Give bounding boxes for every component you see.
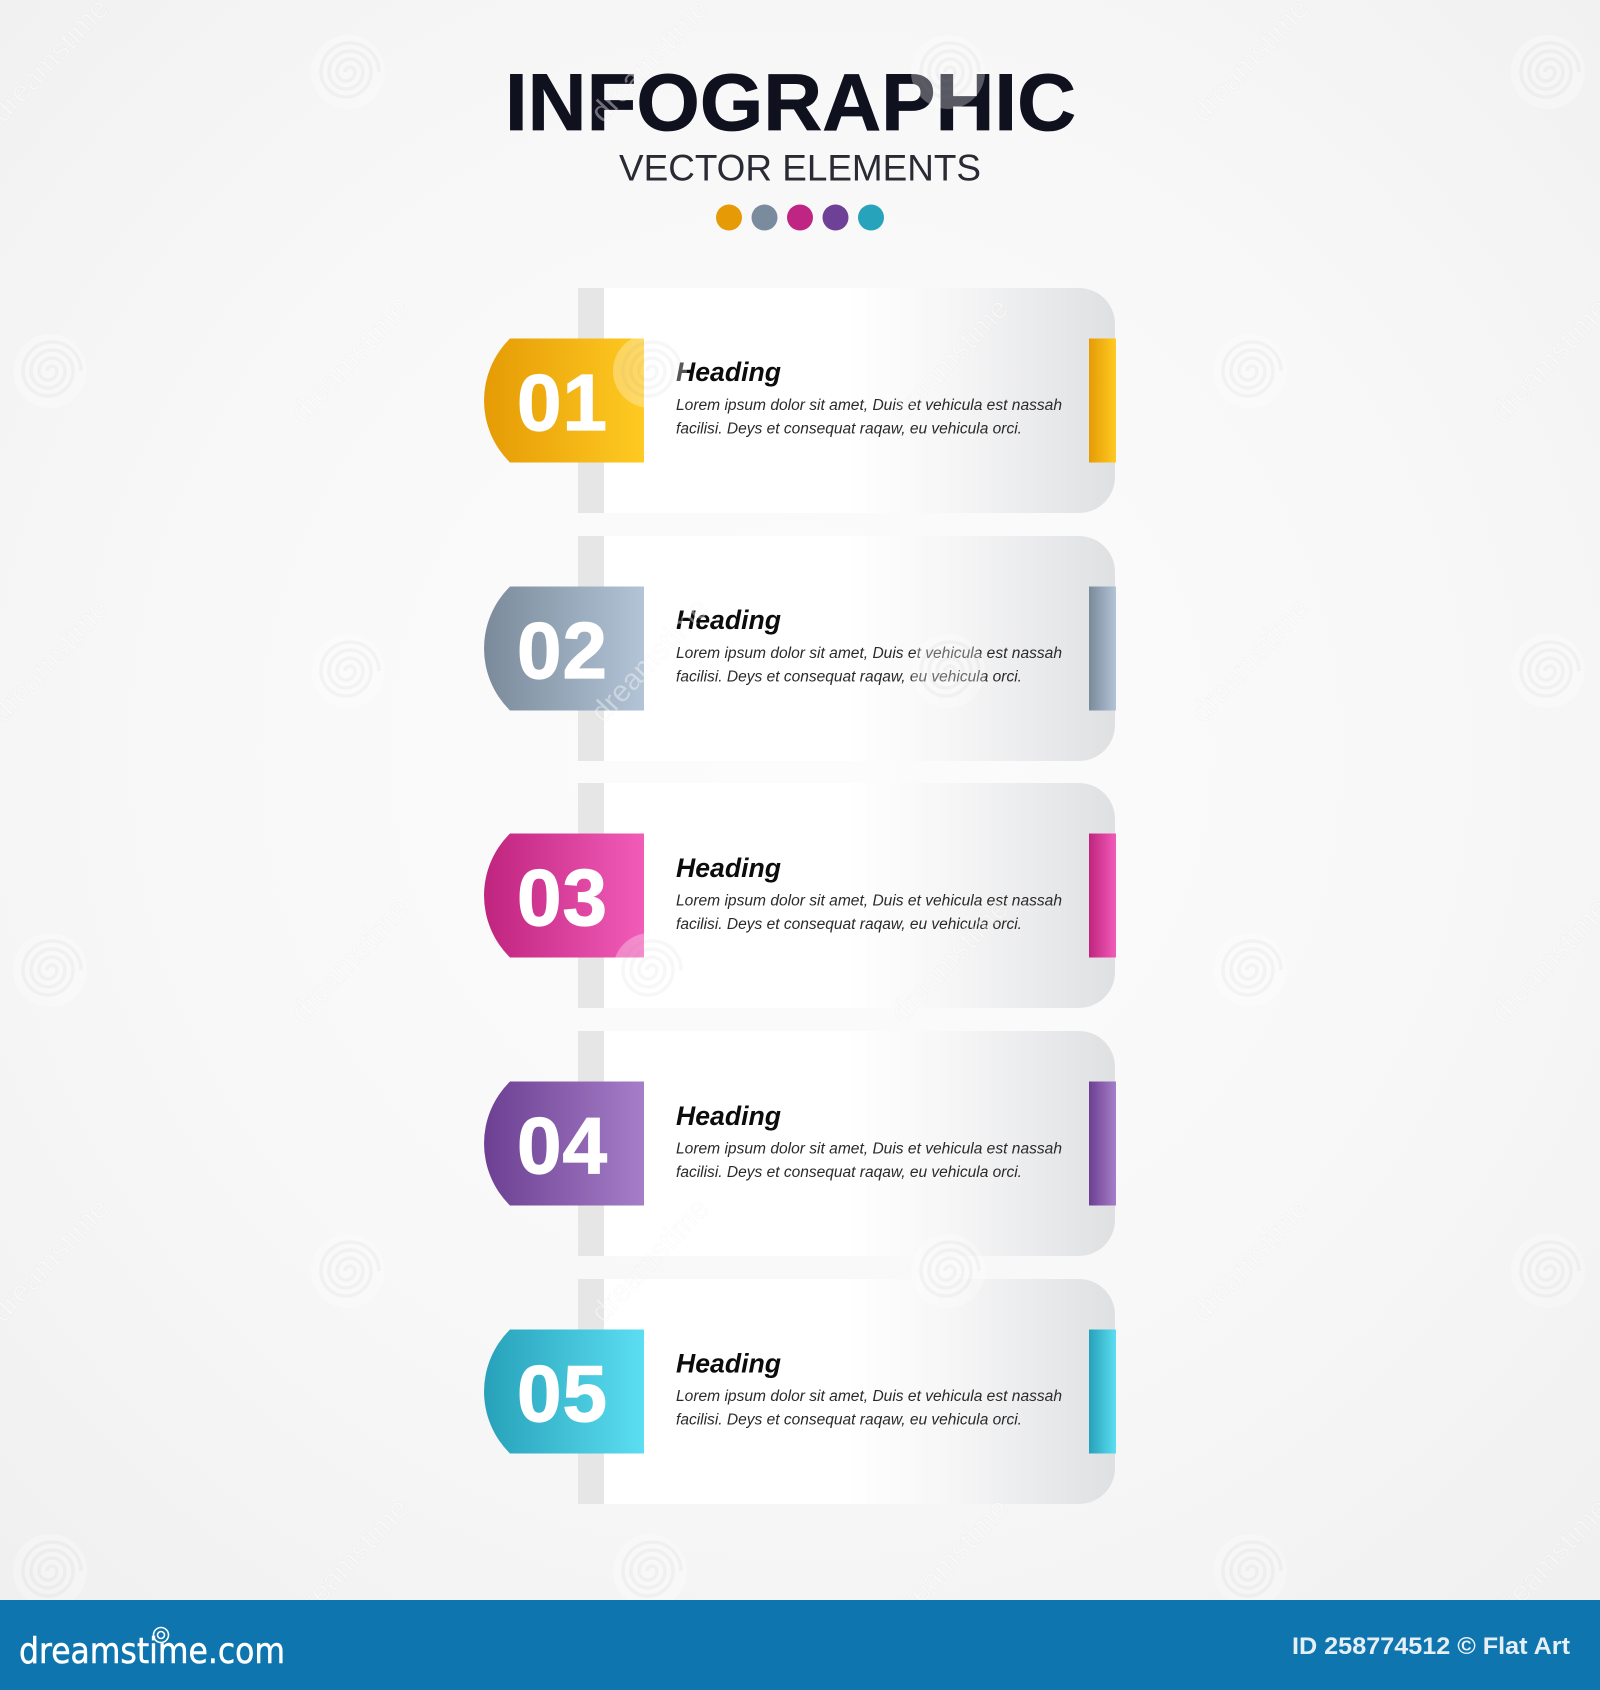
number badge (484, 1082, 644, 1206)
number: 01 (517, 358, 608, 447)
body text: Lorem ipsum dolor sit amet, Duis et vehicula est nassah (676, 645, 1062, 662)
body text: facilisi. Deys et consequat raqaw, eu vehicula orci. (676, 916, 1022, 933)
right tab (1089, 1082, 1116, 1206)
number badge (484, 834, 644, 958)
card (578, 1279, 1115, 1504)
body text: facilisi. Deys et consequat raqaw, eu vehicula orci. (676, 1412, 1022, 1428)
side strip (578, 536, 604, 761)
number: 03 (517, 853, 608, 942)
colour dots (716, 204, 884, 230)
side strip (578, 783, 604, 1008)
footer bar (0, 1600, 1600, 1690)
card (578, 288, 1115, 513)
watermark pattern: dreamstime (285, 892, 416, 1029)
watermark pattern: dreamstime (585, 592, 716, 729)
heading: Heading (676, 1101, 781, 1131)
watermark pattern: dreamstime (1185, 592, 1316, 729)
card (578, 783, 1115, 1008)
side strip (578, 1279, 604, 1504)
heading: Heading (676, 853, 781, 883)
body text: facilisi. Deys et consequat raqaw, eu vehicula orci. (676, 420, 1022, 438)
right tab (1089, 834, 1116, 958)
right tab (1089, 338, 1116, 462)
body text: Lorem ipsum dolor sit amet, Duis et vehicula est nassah (676, 892, 1062, 910)
panel: step 05 (484, 1279, 1116, 1504)
logo spiral (154, 1628, 168, 1642)
card (578, 536, 1115, 761)
body text: Lorem ipsum dolor sit amet, Duis et vehicula est nassah (676, 1140, 1062, 1158)
watermark pattern: dreamstime (1185, 1192, 1316, 1329)
body text (676, 397, 1062, 438)
side strip (578, 288, 604, 513)
image id credit: ID 258774512 © Flat Art (1292, 1633, 1570, 1660)
right tab (1089, 1330, 1116, 1454)
heading: Heading (676, 1348, 781, 1378)
number: 02 (517, 606, 608, 695)
logo text: dreamstime.com (19, 1631, 285, 1672)
panel: step 04 (484, 1031, 1116, 1256)
watermark pattern: dreamstime (885, 1492, 1016, 1629)
number: 04 (517, 1101, 608, 1190)
body text (676, 1388, 1062, 1428)
body text (676, 892, 1062, 933)
number badge (484, 586, 644, 710)
card (578, 1031, 1115, 1256)
watermark pattern: dreamstime (885, 892, 1016, 1029)
body text: Lorem ipsum dolor sit amet, Duis et vehicula est nassah (676, 397, 1062, 414)
body text: facilisi. Deys et consequat raqaw, eu vehicula orci. (676, 668, 1022, 686)
panel: step 02 (484, 536, 1116, 761)
body text (676, 645, 1062, 686)
number badge (484, 338, 644, 462)
heading: Heading (676, 605, 781, 635)
body text: Lorem ipsum dolor sit amet, Duis et vehicula est nassah (676, 1388, 1062, 1405)
subtitle: VECTOR ELEMENTS (619, 148, 981, 188)
panel: step 03 (484, 783, 1116, 1008)
panel: step 01 (484, 288, 1116, 513)
side strip (578, 1031, 604, 1256)
title: INFOGRAPHIC (505, 58, 1076, 148)
right tab (1089, 586, 1116, 710)
watermark pattern: dreamstime (285, 292, 416, 429)
body text: facilisi. Deys et consequat raqaw, eu vehicula orci. (676, 1164, 1022, 1181)
watermark pattern: dreamstime (585, 1192, 716, 1329)
watermark pattern: dreamstime (285, 1492, 416, 1629)
number badge (484, 1330, 644, 1454)
heading: Heading (676, 357, 781, 387)
body text (676, 1140, 1062, 1181)
number: 05 (517, 1349, 608, 1438)
watermark pattern: dreamstime (885, 292, 1016, 429)
